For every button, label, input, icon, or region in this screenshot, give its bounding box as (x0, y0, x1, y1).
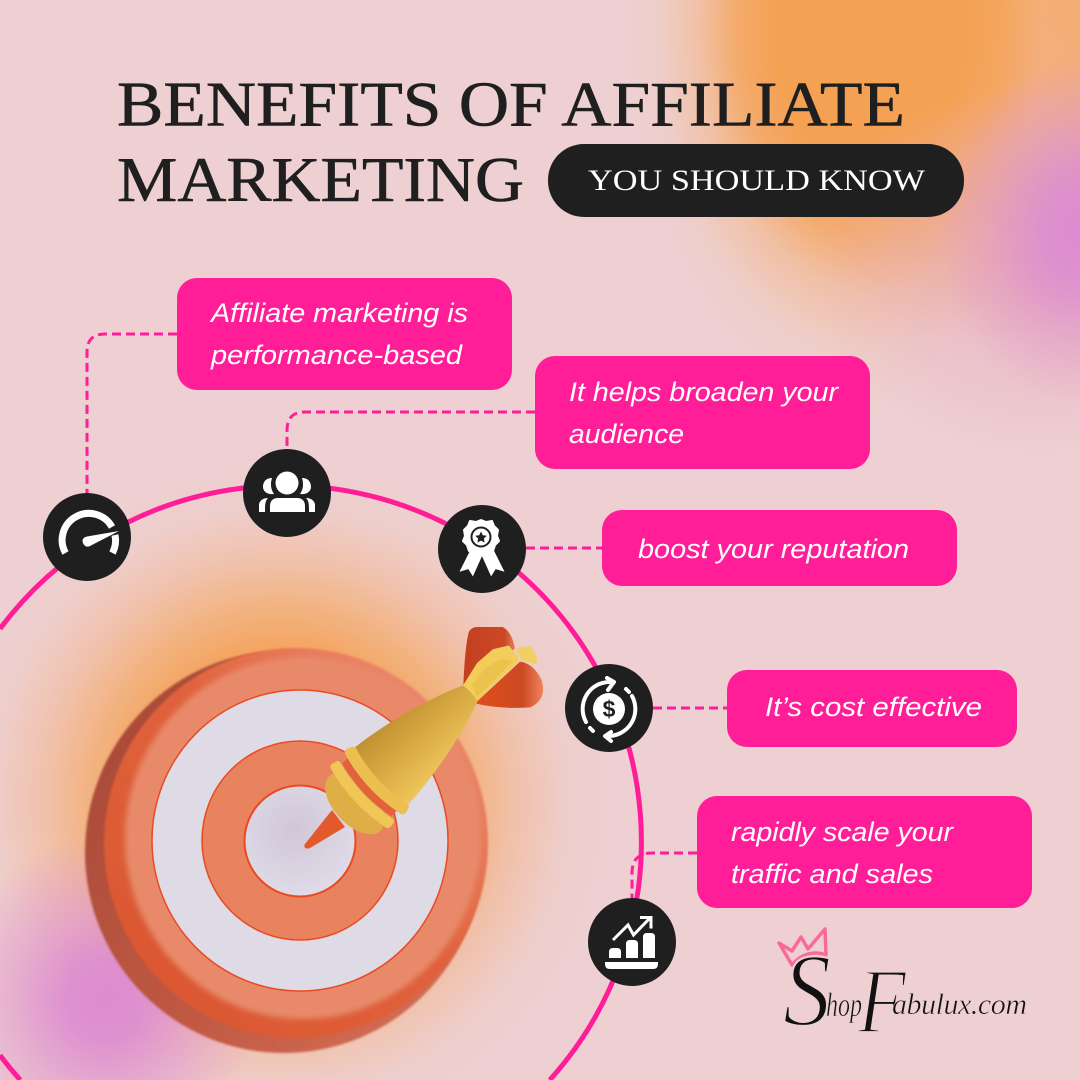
board face (104, 648, 488, 1038)
logo: hop (826, 987, 862, 1024)
icon: people (243, 449, 331, 537)
base lump (314, 762, 395, 845)
outer white ring (152, 690, 448, 991)
card 2: audience (569, 419, 684, 449)
card 1: Affiliate marketing is (209, 298, 468, 328)
title (117, 70, 905, 215)
flights (463, 627, 543, 708)
lower collar (330, 764, 391, 828)
card 5: rapidly scale your (731, 817, 954, 847)
dashed connectors (87, 334, 727, 900)
icon: cost cycle: $ (603, 696, 616, 722)
card 1: performance-based (210, 340, 463, 370)
subtitle pill: YOU SHOULD KNOW (588, 164, 926, 197)
inner orange ring (202, 741, 398, 940)
board side (85, 651, 483, 1053)
card 3 (602, 510, 957, 586)
logo (779, 929, 1027, 1052)
logo: abulux.com (892, 988, 1027, 1021)
bullseye (244, 786, 356, 896)
icon: award ribbon (438, 505, 526, 593)
dartboard (85, 648, 488, 1053)
logo: F (857, 950, 907, 1052)
cone (351, 664, 498, 808)
title: BENEFITS OF AFFILIATE (117, 70, 905, 140)
card 5 (697, 796, 1032, 908)
card 4: It’s cost effective (765, 692, 982, 722)
card 3: boost your reputation (638, 534, 909, 564)
tip (304, 810, 345, 849)
logo: S (783, 933, 831, 1048)
dart (304, 627, 543, 849)
red band (339, 758, 397, 819)
card 5: traffic and sales (731, 859, 933, 889)
card 1 (177, 278, 512, 390)
card 4 (727, 670, 1017, 747)
card 2 (535, 356, 870, 469)
icon: cost cycle (565, 664, 653, 752)
shaft and collars (311, 663, 498, 846)
upper collar (345, 749, 406, 814)
subtitle pill (548, 144, 964, 217)
target ring (0, 486, 641, 1080)
icon: growth chart (588, 898, 676, 986)
icon: speedometer (43, 493, 131, 581)
icon: crown (779, 929, 826, 965)
card 2: It helps broaden your (569, 377, 839, 407)
title: MARKETING (117, 145, 524, 215)
